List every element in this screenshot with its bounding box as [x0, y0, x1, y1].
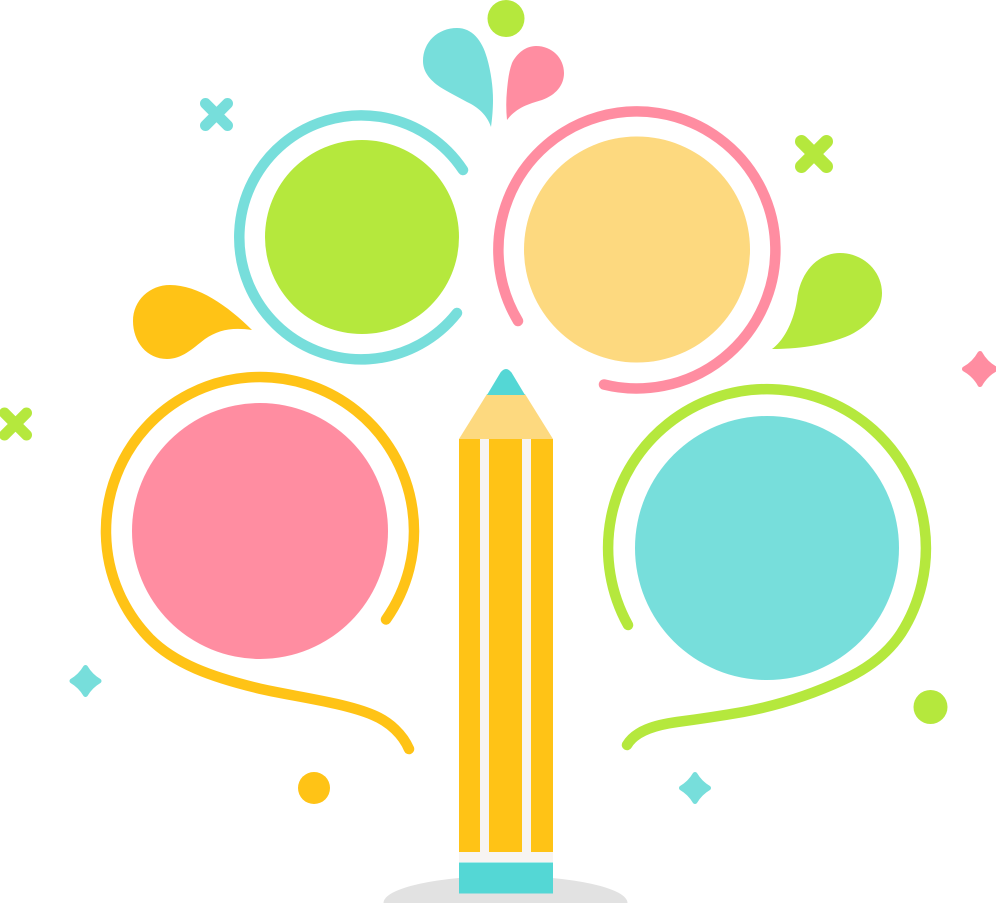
pencil lead — [487, 369, 525, 395]
yellow ring with tail — [106, 377, 414, 749]
teal ring — [239, 115, 463, 359]
panel: bottom right circle — [608, 389, 926, 745]
panel: top left circle — [239, 115, 463, 359]
icon: green dot right — [914, 690, 948, 724]
pencil shadow — [384, 876, 628, 903]
green ring with tail — [608, 389, 926, 745]
pencil wood tip — [459, 394, 553, 439]
icon: pink drop — [506, 46, 564, 120]
pencil eraser — [459, 862, 553, 894]
icon: green drop — [772, 253, 882, 349]
icon: teal sparkle left — [72, 668, 99, 694]
pencil stripes — [480, 439, 531, 852]
icon: green dot top — [488, 0, 524, 37]
pencil band — [459, 852, 553, 862]
panel: bottom left circle — [106, 377, 414, 749]
icon: teal cross — [206, 104, 228, 126]
icon: green cross left — [4, 413, 26, 435]
icon: yellow drop — [133, 285, 252, 359]
icon: yellow dot — [298, 772, 330, 804]
pencil — [459, 369, 553, 894]
icon: green cross right — [802, 142, 826, 166]
panel: top right circle — [498, 111, 775, 388]
pink ring — [498, 111, 775, 388]
pencil body — [459, 439, 553, 852]
icon: teal drop — [423, 28, 493, 127]
icon: teal sparkle bottom — [682, 774, 708, 802]
icon: pink sparkle — [964, 354, 996, 384]
